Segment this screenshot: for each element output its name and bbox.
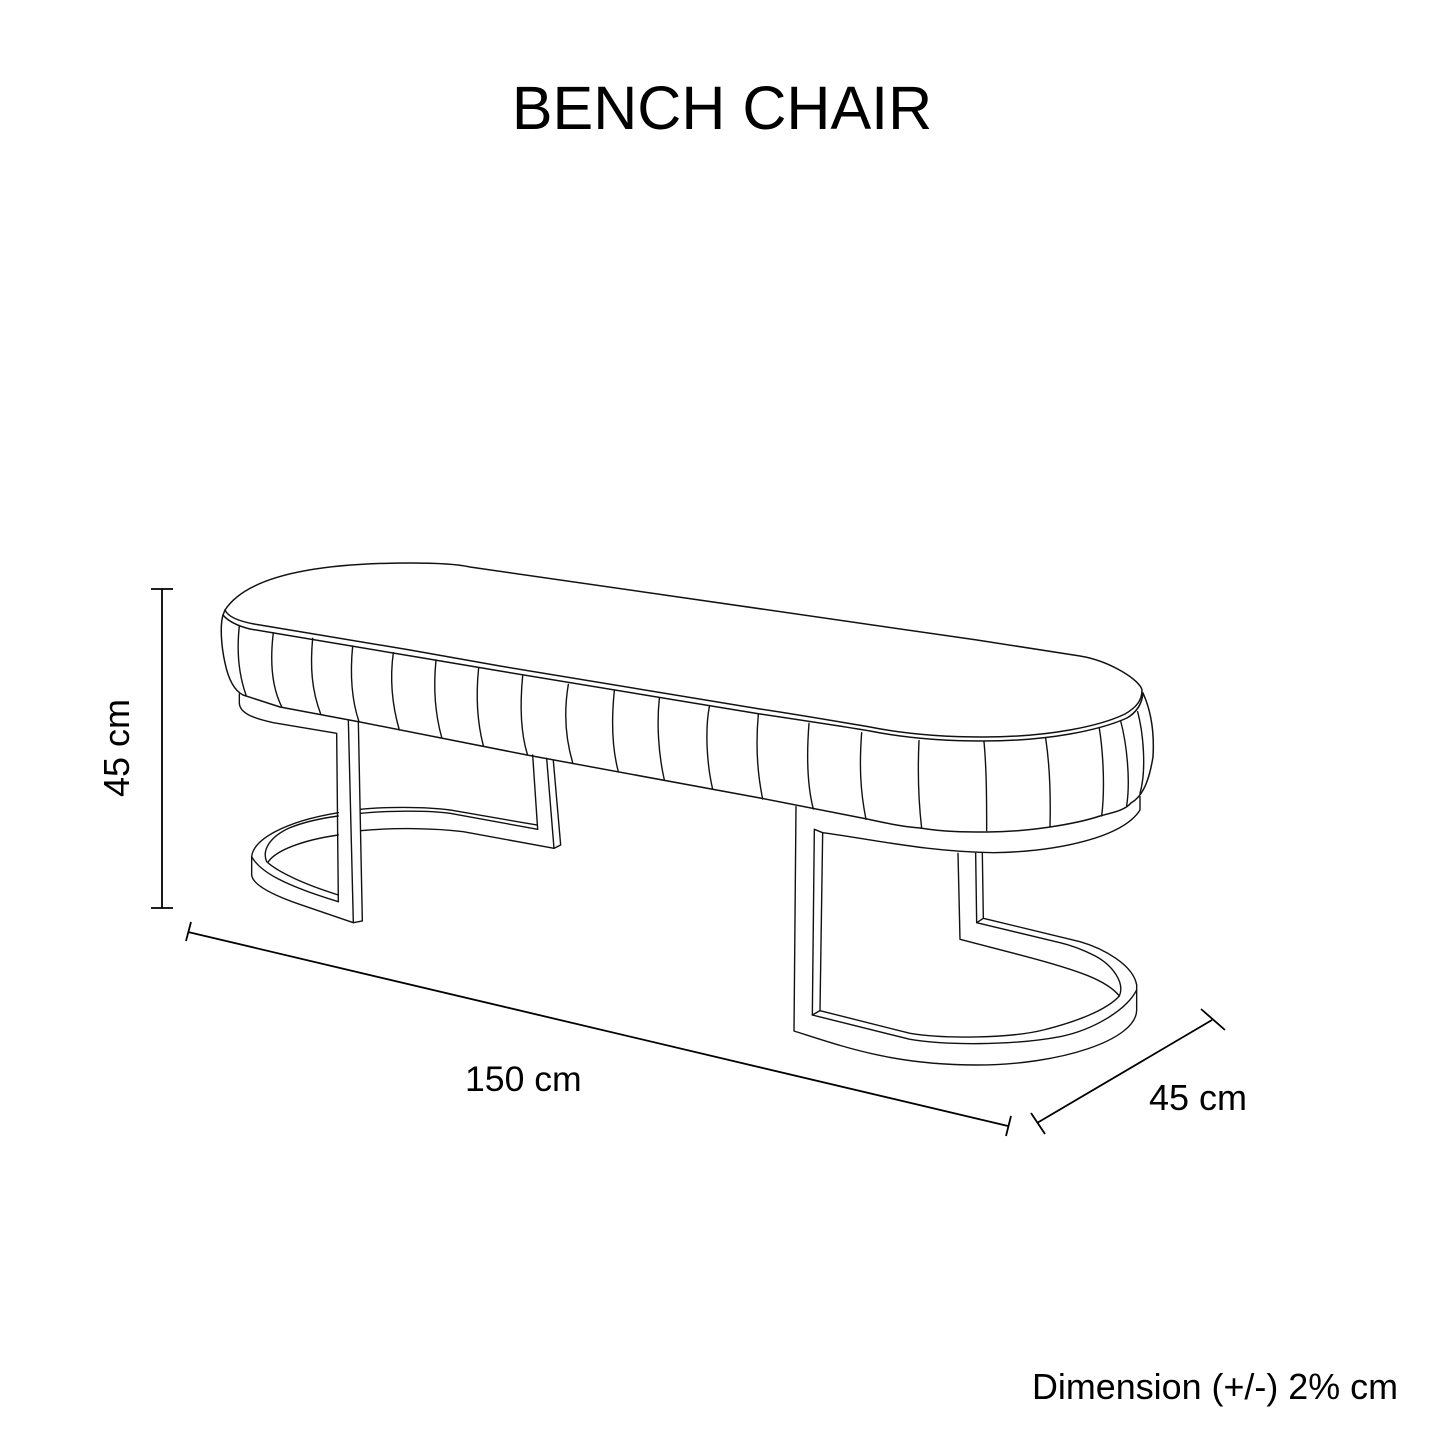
dimension: depth: [1031, 1009, 1225, 1134]
label: height: 45 cm: [96, 699, 137, 797]
left leg frame: [239, 694, 561, 923]
title: BENCH CHAIR: [512, 74, 932, 142]
upholstery ribs middle: [613, 691, 763, 799]
upholstery ribs left: [238, 626, 573, 763]
tolerance note: Dimension (+/-) 2% cm: [1032, 1367, 1398, 1407]
label: depth: 45 cm: [1149, 1077, 1247, 1118]
right leg frame: [794, 797, 1140, 1065]
seat top outline: [221, 563, 1153, 832]
bench drawing: [221, 563, 1153, 1065]
label: length: 150 cm: [465, 1059, 582, 1099]
dimension: length: [186, 922, 1011, 1136]
dimension: height: [151, 589, 173, 908]
upholstery ribs right: [808, 712, 1144, 831]
